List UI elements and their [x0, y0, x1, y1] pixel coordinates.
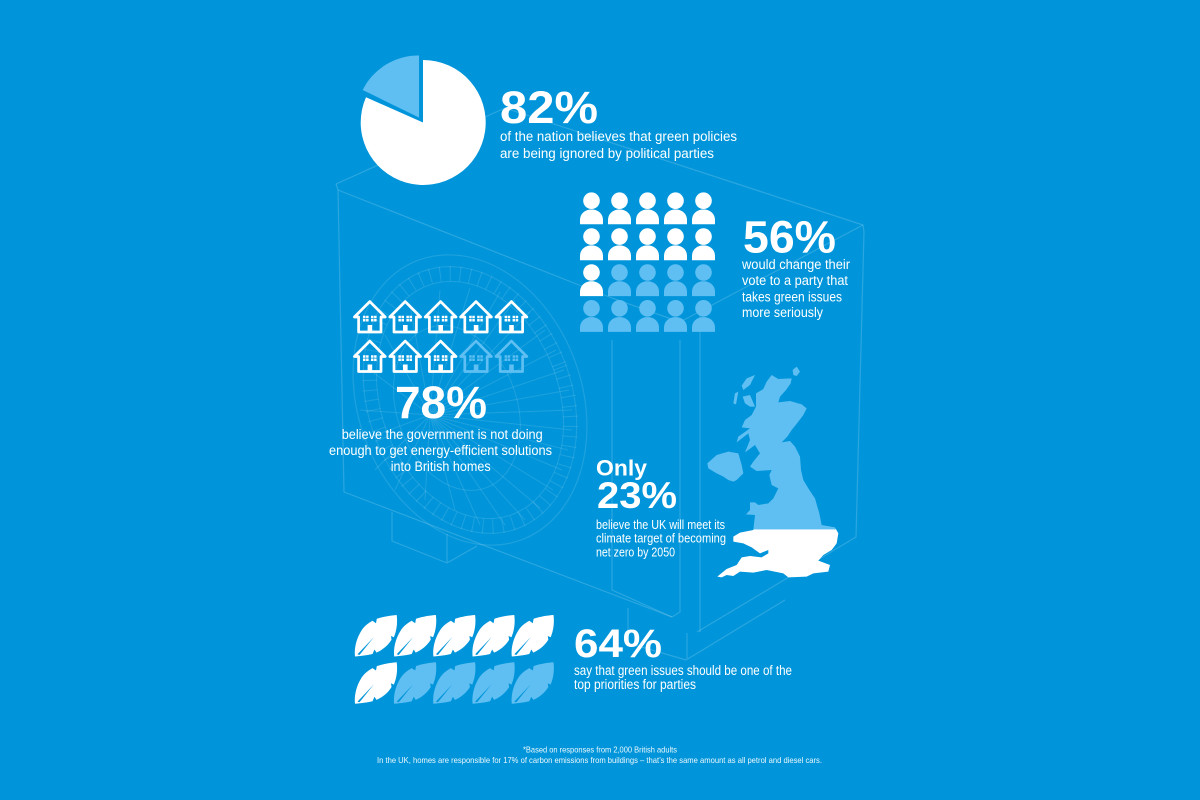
- pie chart: [361, 55, 486, 185]
- panel: 64% leaves: [355, 615, 792, 704]
- text: 78% description: [329, 427, 552, 474]
- text: 64% description: top priorities for parties: [574, 677, 696, 692]
- fan illustration: [314, 222, 626, 578]
- UK map: [707, 367, 838, 577]
- text: 56% description: vote to a party that: [742, 273, 848, 288]
- text: 82% description: are being ignored by political parties: [500, 146, 714, 161]
- text: 56% description: more seriously: [742, 305, 823, 320]
- footnote: [377, 745, 822, 765]
- text: 56% description: [741, 257, 850, 320]
- text: 82% description: [500, 129, 737, 161]
- panel: 56% people: [580, 192, 850, 332]
- stat: 64%: 64%: [574, 622, 662, 666]
- text: 78% description: believe the government is not doing: [342, 427, 543, 442]
- text: 78% description: into British homes: [391, 459, 491, 474]
- people pictogram: [580, 192, 715, 332]
- stat: 82%: 82%: [500, 82, 598, 133]
- text: 23% description: net zero by 2050: [596, 546, 675, 560]
- footnote: *Based on responses from 2,000 British adults: [523, 745, 677, 755]
- stat: 78%: 78%: [395, 377, 487, 428]
- text: 56% description: takes green issues: [742, 290, 842, 304]
- text: 23% description: climate target of becoming: [596, 532, 726, 546]
- panel: 23% UK map: [596, 367, 838, 577]
- text: 23% description: believe the UK will meet its: [596, 518, 725, 532]
- stat: Only: Only: [596, 456, 647, 480]
- heat pump outline illustration: [336, 108, 864, 660]
- text: 23% description: [596, 518, 726, 560]
- stat: 23%: 23%: [597, 475, 677, 516]
- house pictogram: [354, 302, 527, 372]
- panel: 78% houses: [329, 302, 552, 474]
- text: 56% description: would change their: [741, 257, 850, 272]
- text: 64% description: say that green issues should be one of the: [574, 663, 792, 678]
- text: 82% description: of the nation believes that green policies: [500, 129, 737, 144]
- footnote: In the UK, homes are responsible for 17% of carbon emissions from buildings – that’s the same amount as all petrol and diesel cars.: [377, 755, 822, 765]
- text: 64% description: [574, 663, 792, 692]
- leaf pictogram: [355, 615, 554, 704]
- stat: 56%: 56%: [743, 212, 836, 262]
- text: 78% description: enough to get energy-efficient solutions: [329, 443, 552, 458]
- panel: 82% pie: [361, 55, 737, 185]
